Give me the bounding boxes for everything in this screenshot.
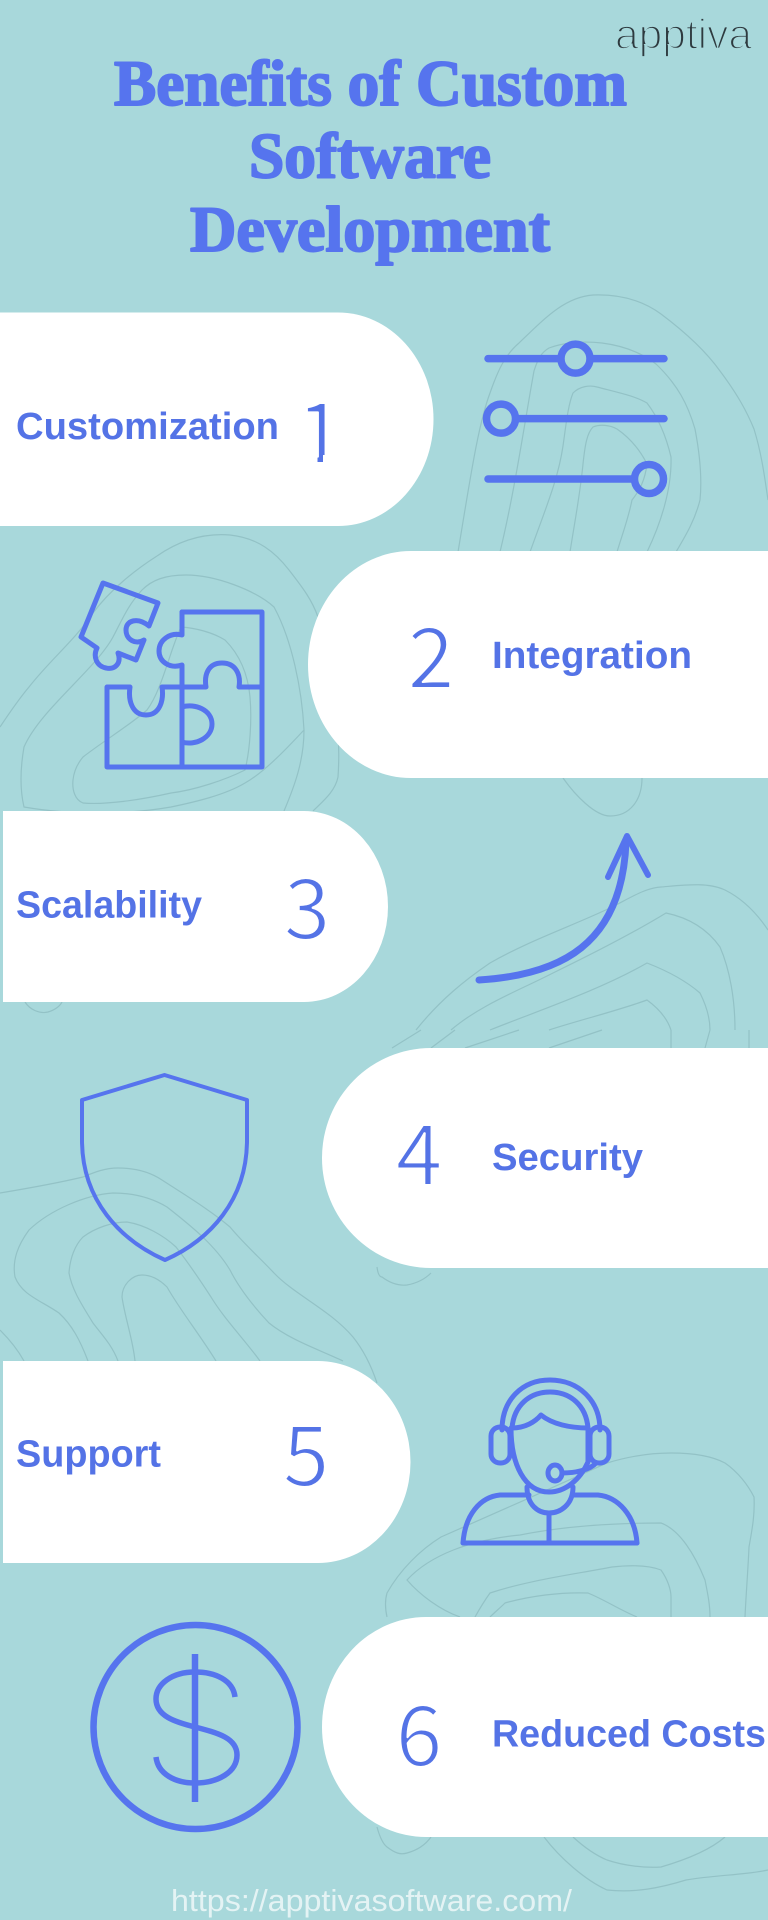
icon: sliders [486, 344, 664, 494]
panel: 1 customization: 1 [297, 367, 343, 488]
panel: 4 security: 4 [396, 1089, 442, 1210]
panel: 4 security [322, 1048, 768, 1268]
panel: 5 support [3, 1361, 410, 1563]
icon: growth arrow [479, 836, 648, 980]
panel: 2 integration: Integration [492, 635, 692, 677]
title: Development [190, 194, 550, 266]
panel: 3 scalability [3, 811, 388, 1002]
panel: 4 security: Security [492, 1137, 643, 1179]
panel: 2 integration: 2 [408, 592, 454, 713]
title: Benefits of Custom [114, 48, 627, 120]
panel: 6 reduced costs: Reduced Costs [492, 1714, 766, 1756]
title: Software [249, 120, 491, 192]
panel: 2 integration [308, 551, 768, 778]
icon: support agent with headset [463, 1380, 637, 1543]
brand logo: apptiva: apptiva [615, 10, 753, 58]
panel: 3 scalability: 3 [284, 843, 330, 964]
title [114, 48, 627, 266]
icon: dollar coin [94, 1625, 298, 1829]
panel: 6 reduced costs [322, 1617, 768, 1837]
website url: https://apptivasoftware.com/ [171, 1883, 572, 1918]
panel: 1 customization [0, 312, 434, 526]
panel: 6 reduced costs: 6 [396, 1670, 442, 1791]
icon: shield [82, 1075, 247, 1260]
panel: 1 customization: Customization [16, 406, 279, 448]
panel: 5 support: 5 [283, 1390, 329, 1511]
icon: puzzle pieces [81, 583, 262, 767]
panel: 3 scalability: Scalability [16, 885, 202, 927]
panel: 5 support: Support [16, 1434, 161, 1476]
